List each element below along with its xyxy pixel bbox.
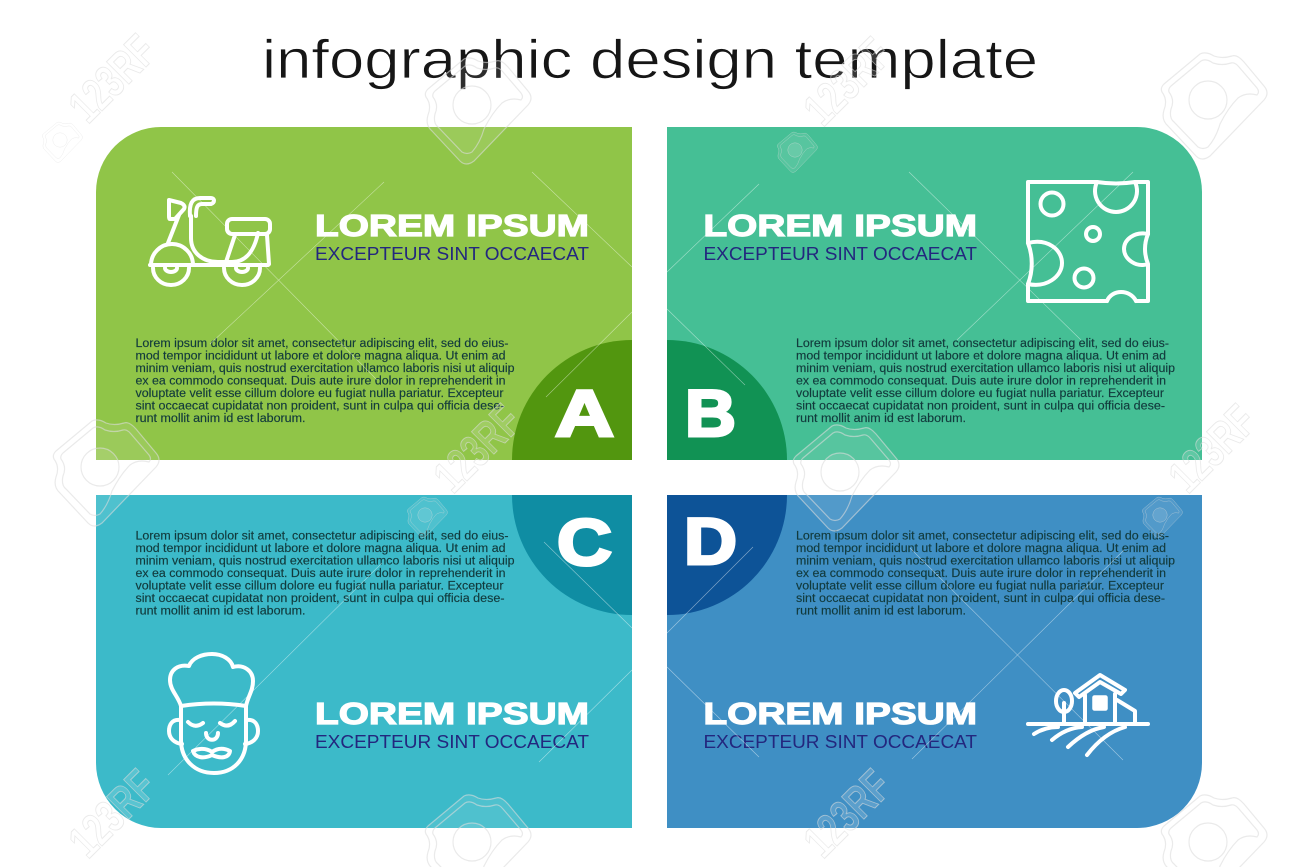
panel B body text: voluptate velit esse cillum dolore eu fugiat nulla pariatur. Excepteur [796, 388, 1164, 400]
watermark: 123RF [423, 395, 531, 502]
watermark: 123RF [58, 25, 166, 132]
panel A heading: LOREM IPSUM [315, 208, 589, 243]
panel A letter badge [512, 340, 632, 460]
panel B subheading: EXCEPTEUR SINT OCCAECAT [704, 244, 977, 264]
title: infographic design template [262, 28, 1038, 90]
panel B background [667, 127, 1202, 460]
panel C body text: sint occaecat cupidatat non proident, sunt in culpa qui officia dese- [136, 593, 505, 605]
panel A letter badge: A [555, 376, 614, 450]
panel C body text: ex ea commodo consequat. Duis aute irure dolor in reprehenderit in [136, 568, 506, 580]
icon: cheese [1028, 182, 1148, 301]
panel B body text: minim veniam, quis nostrud exercitation ullamco laboris nisi ut aliquip [796, 363, 1175, 375]
panel C body text: Lorem ipsum dolor sit amet, consectetur adipiscing elit, sed do eius- [136, 530, 509, 542]
panel C heading: LOREM IPSUM [315, 696, 589, 731]
panel C letter badge: C [557, 505, 612, 579]
panel C subheading: EXCEPTEUR SINT OCCAECAT [315, 732, 589, 752]
panel C letter badge [512, 495, 632, 615]
panel D letter badge [667, 495, 787, 615]
panel A body text: voluptate velit esse cillum dolore eu fugiat nulla pariatur. Excepteur [136, 388, 504, 400]
panel C body text [136, 530, 514, 618]
panel B letter badge [667, 340, 787, 460]
panel: C [96, 495, 632, 828]
panel B body text: mod tempor incididunt ut labore et dolore magna aliqua. Ut enim ad [796, 350, 1166, 362]
panel A body text: runt mollit anim id est laborum. [136, 413, 306, 425]
icon: farmhouse [1028, 675, 1148, 755]
panel B letter badge: B [685, 376, 736, 450]
panel A body text [136, 338, 514, 425]
panel: A [96, 127, 632, 460]
panel D background [667, 495, 1202, 828]
watermark: 123RF [793, 760, 901, 867]
panel A subheading: EXCEPTEUR SINT OCCAECAT [315, 244, 589, 264]
panel D body text: voluptate velit esse cillum dolore eu fugiat nulla pariatur. Excepteur [796, 580, 1164, 592]
panel C body text: minim veniam, quis nostrud exercitation ullamco laboris nisi ut aliquip [136, 556, 514, 568]
panel D body text [796, 530, 1175, 618]
icon: chef [169, 654, 258, 773]
panel B body text: Lorem ipsum dolor sit amet, consectetur adipiscing elit, sed do eius- [796, 338, 1169, 350]
panel: B [667, 127, 1202, 460]
panel D body text: runt mollit anim id est laborum. [796, 606, 966, 618]
panel D letter badge: D [684, 504, 737, 578]
panel A body text: mod tempor incididunt ut labore et dolore magna aliqua. Ut enim ad [136, 350, 505, 362]
icon: scooter [150, 198, 270, 285]
watermark: 123RF [58, 760, 166, 867]
panel A body text: sint occaecat cupidatat non proident, sunt in culpa qui officia dese- [136, 400, 505, 412]
panel: D [667, 495, 1202, 828]
panel C background [96, 495, 632, 828]
panel D body text: mod tempor incididunt ut labore et dolore magna aliqua. Ut enim ad [796, 543, 1166, 555]
panel C body text: voluptate velit esse cillum dolore eu fugiat nulla pariatur. Excepteur [136, 580, 504, 592]
panel C body text: runt mollit anim id est laborum. [136, 606, 306, 618]
panel A body text: Lorem ipsum dolor sit amet, consectetur adipiscing elit, sed do eius- [136, 338, 509, 350]
watermark: 123RF [793, 28, 901, 135]
panel D body text: ex ea commodo consequat. Duis aute irure dolor in reprehenderit in [796, 568, 1166, 580]
panel B body text: runt mollit anim id est laborum. [796, 413, 966, 425]
panel A background [96, 127, 632, 460]
panel B heading: LOREM IPSUM [704, 208, 977, 243]
panel D body text: sint occaecat cupidatat non proident, sunt in culpa qui officia dese- [796, 593, 1165, 605]
panel B body text: ex ea commodo consequat. Duis aute irure dolor in reprehenderit in [796, 376, 1166, 388]
panel D subheading: EXCEPTEUR SINT OCCAECAT [704, 732, 977, 752]
panel A body text: minim veniam, quis nostrud exercitation ullamco laboris nisi ut aliquip [136, 363, 514, 375]
panel B body text [796, 338, 1175, 425]
panel A body text: ex ea commodo consequat. Duis aute irure dolor in reprehenderit in [136, 376, 506, 388]
panel B body text: sint occaecat cupidatat non proident, sunt in culpa qui officia dese- [796, 400, 1165, 412]
panel D body text: minim veniam, quis nostrud exercitation ullamco laboris nisi ut aliquip [796, 556, 1175, 568]
watermark: 123RF [1158, 395, 1266, 502]
panel D heading: LOREM IPSUM [704, 696, 977, 731]
panel D body text: Lorem ipsum dolor sit amet, consectetur adipiscing elit, sed do eius- [796, 530, 1169, 542]
panel C body text: mod tempor incididunt ut labore et dolore magna aliqua. Ut enim ad [136, 543, 505, 555]
